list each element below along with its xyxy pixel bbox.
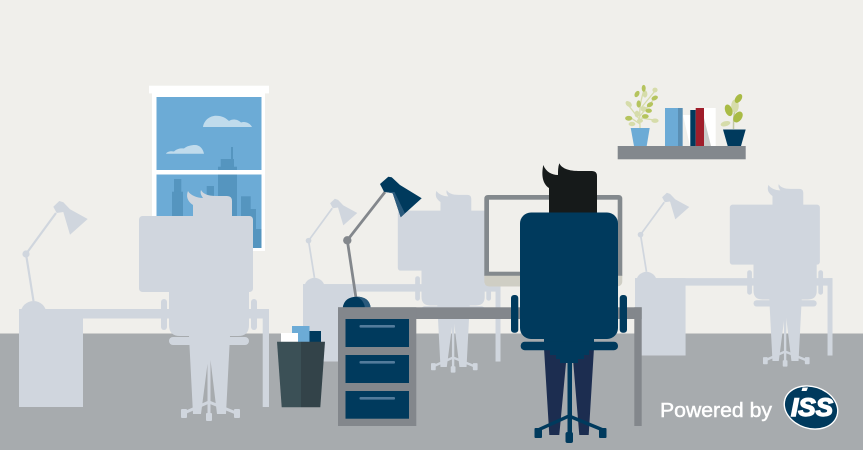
wall shelf with plants and books	[618, 85, 746, 159]
books	[665, 108, 716, 146]
chair	[511, 212, 627, 443]
window	[149, 86, 269, 251]
drawer 3	[346, 391, 409, 419]
background desk and colleague, centre	[303, 190, 501, 373]
drawer 2	[346, 355, 409, 383]
background desk and colleague, left	[19, 190, 269, 421]
front worker on navy chair	[511, 163, 627, 443]
hair	[542, 163, 597, 214]
trousers	[544, 348, 594, 435]
plant right	[720, 93, 746, 146]
powered by label: Powered by	[660, 400, 772, 422]
ISS logo: ISS	[791, 394, 833, 422]
clouds	[166, 116, 252, 154]
plant left	[624, 85, 659, 146]
drawer 1	[346, 319, 409, 347]
wall	[0, 0, 863, 334]
background desk and colleague, right	[635, 184, 833, 367]
ISS logo	[778, 378, 844, 437]
front monitor	[484, 195, 622, 286]
waste bin	[277, 326, 325, 407]
front desk with drawers	[338, 307, 642, 426]
city skyline	[172, 147, 262, 248]
desk lamp	[343, 177, 422, 308]
floor	[0, 334, 863, 450]
